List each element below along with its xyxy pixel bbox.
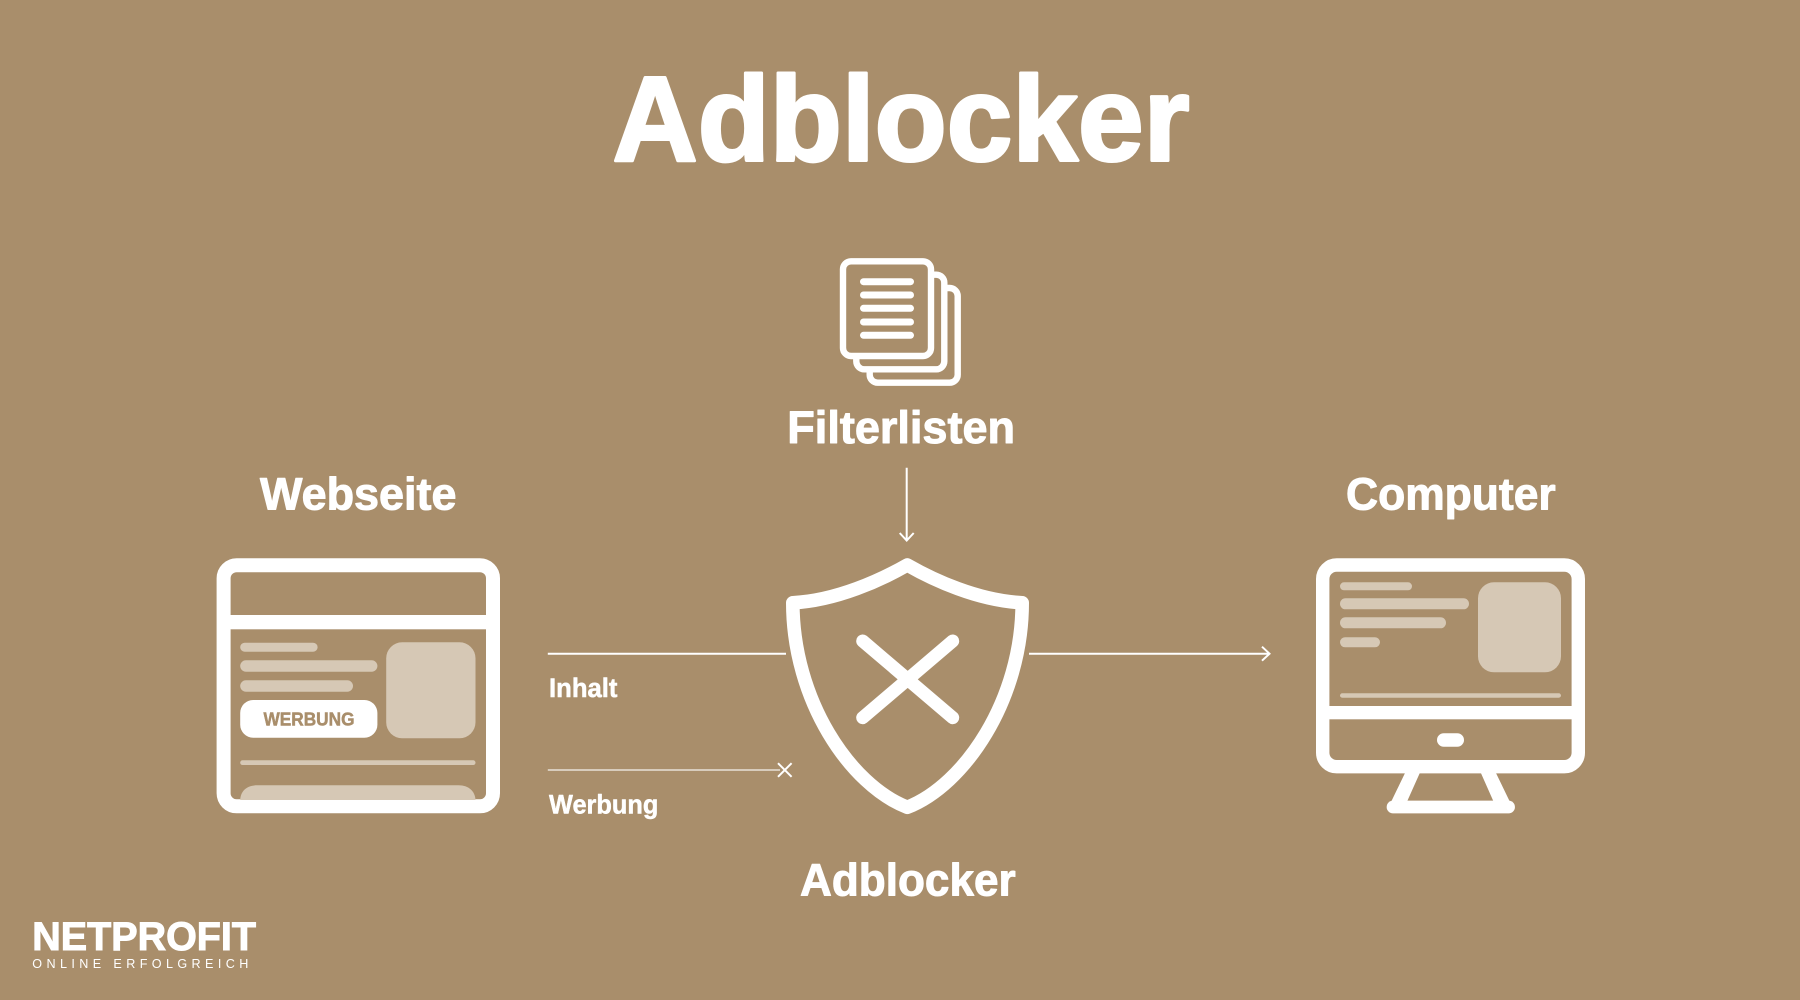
icon: desktop monitor xyxy=(1323,565,1578,807)
heading: Webseite: Webseite xyxy=(260,469,456,520)
label: Werbung: Werbung xyxy=(549,790,658,820)
arrow: ad flow blocked xyxy=(548,763,792,820)
arrow: filter lists to adblocker xyxy=(900,468,914,540)
logo: Netprofit: ONLINE ERFOLGREICH xyxy=(32,957,248,971)
label: Inhalt: Inhalt xyxy=(549,673,618,703)
ad button: WERBUNG xyxy=(264,708,354,730)
panel: adblocker xyxy=(793,565,1022,906)
panel: filter lists xyxy=(787,261,1015,540)
ad button xyxy=(240,700,377,738)
panel: computer xyxy=(1323,469,1578,807)
panel: website xyxy=(224,469,493,806)
heading: Adblocker: Adblocker xyxy=(800,855,1016,906)
title: Adblocker xyxy=(612,51,1190,187)
icon: shield with cross xyxy=(793,565,1022,807)
logo: Netprofit: NETPROFIT xyxy=(32,915,256,959)
heading: Computer: Computer xyxy=(1346,469,1556,520)
heading: Filterlisten: Filterlisten xyxy=(787,402,1015,453)
icon: stacked documents xyxy=(843,261,958,383)
arrow: adblocker to computer xyxy=(1029,647,1270,661)
icon: browser window xyxy=(224,565,493,806)
